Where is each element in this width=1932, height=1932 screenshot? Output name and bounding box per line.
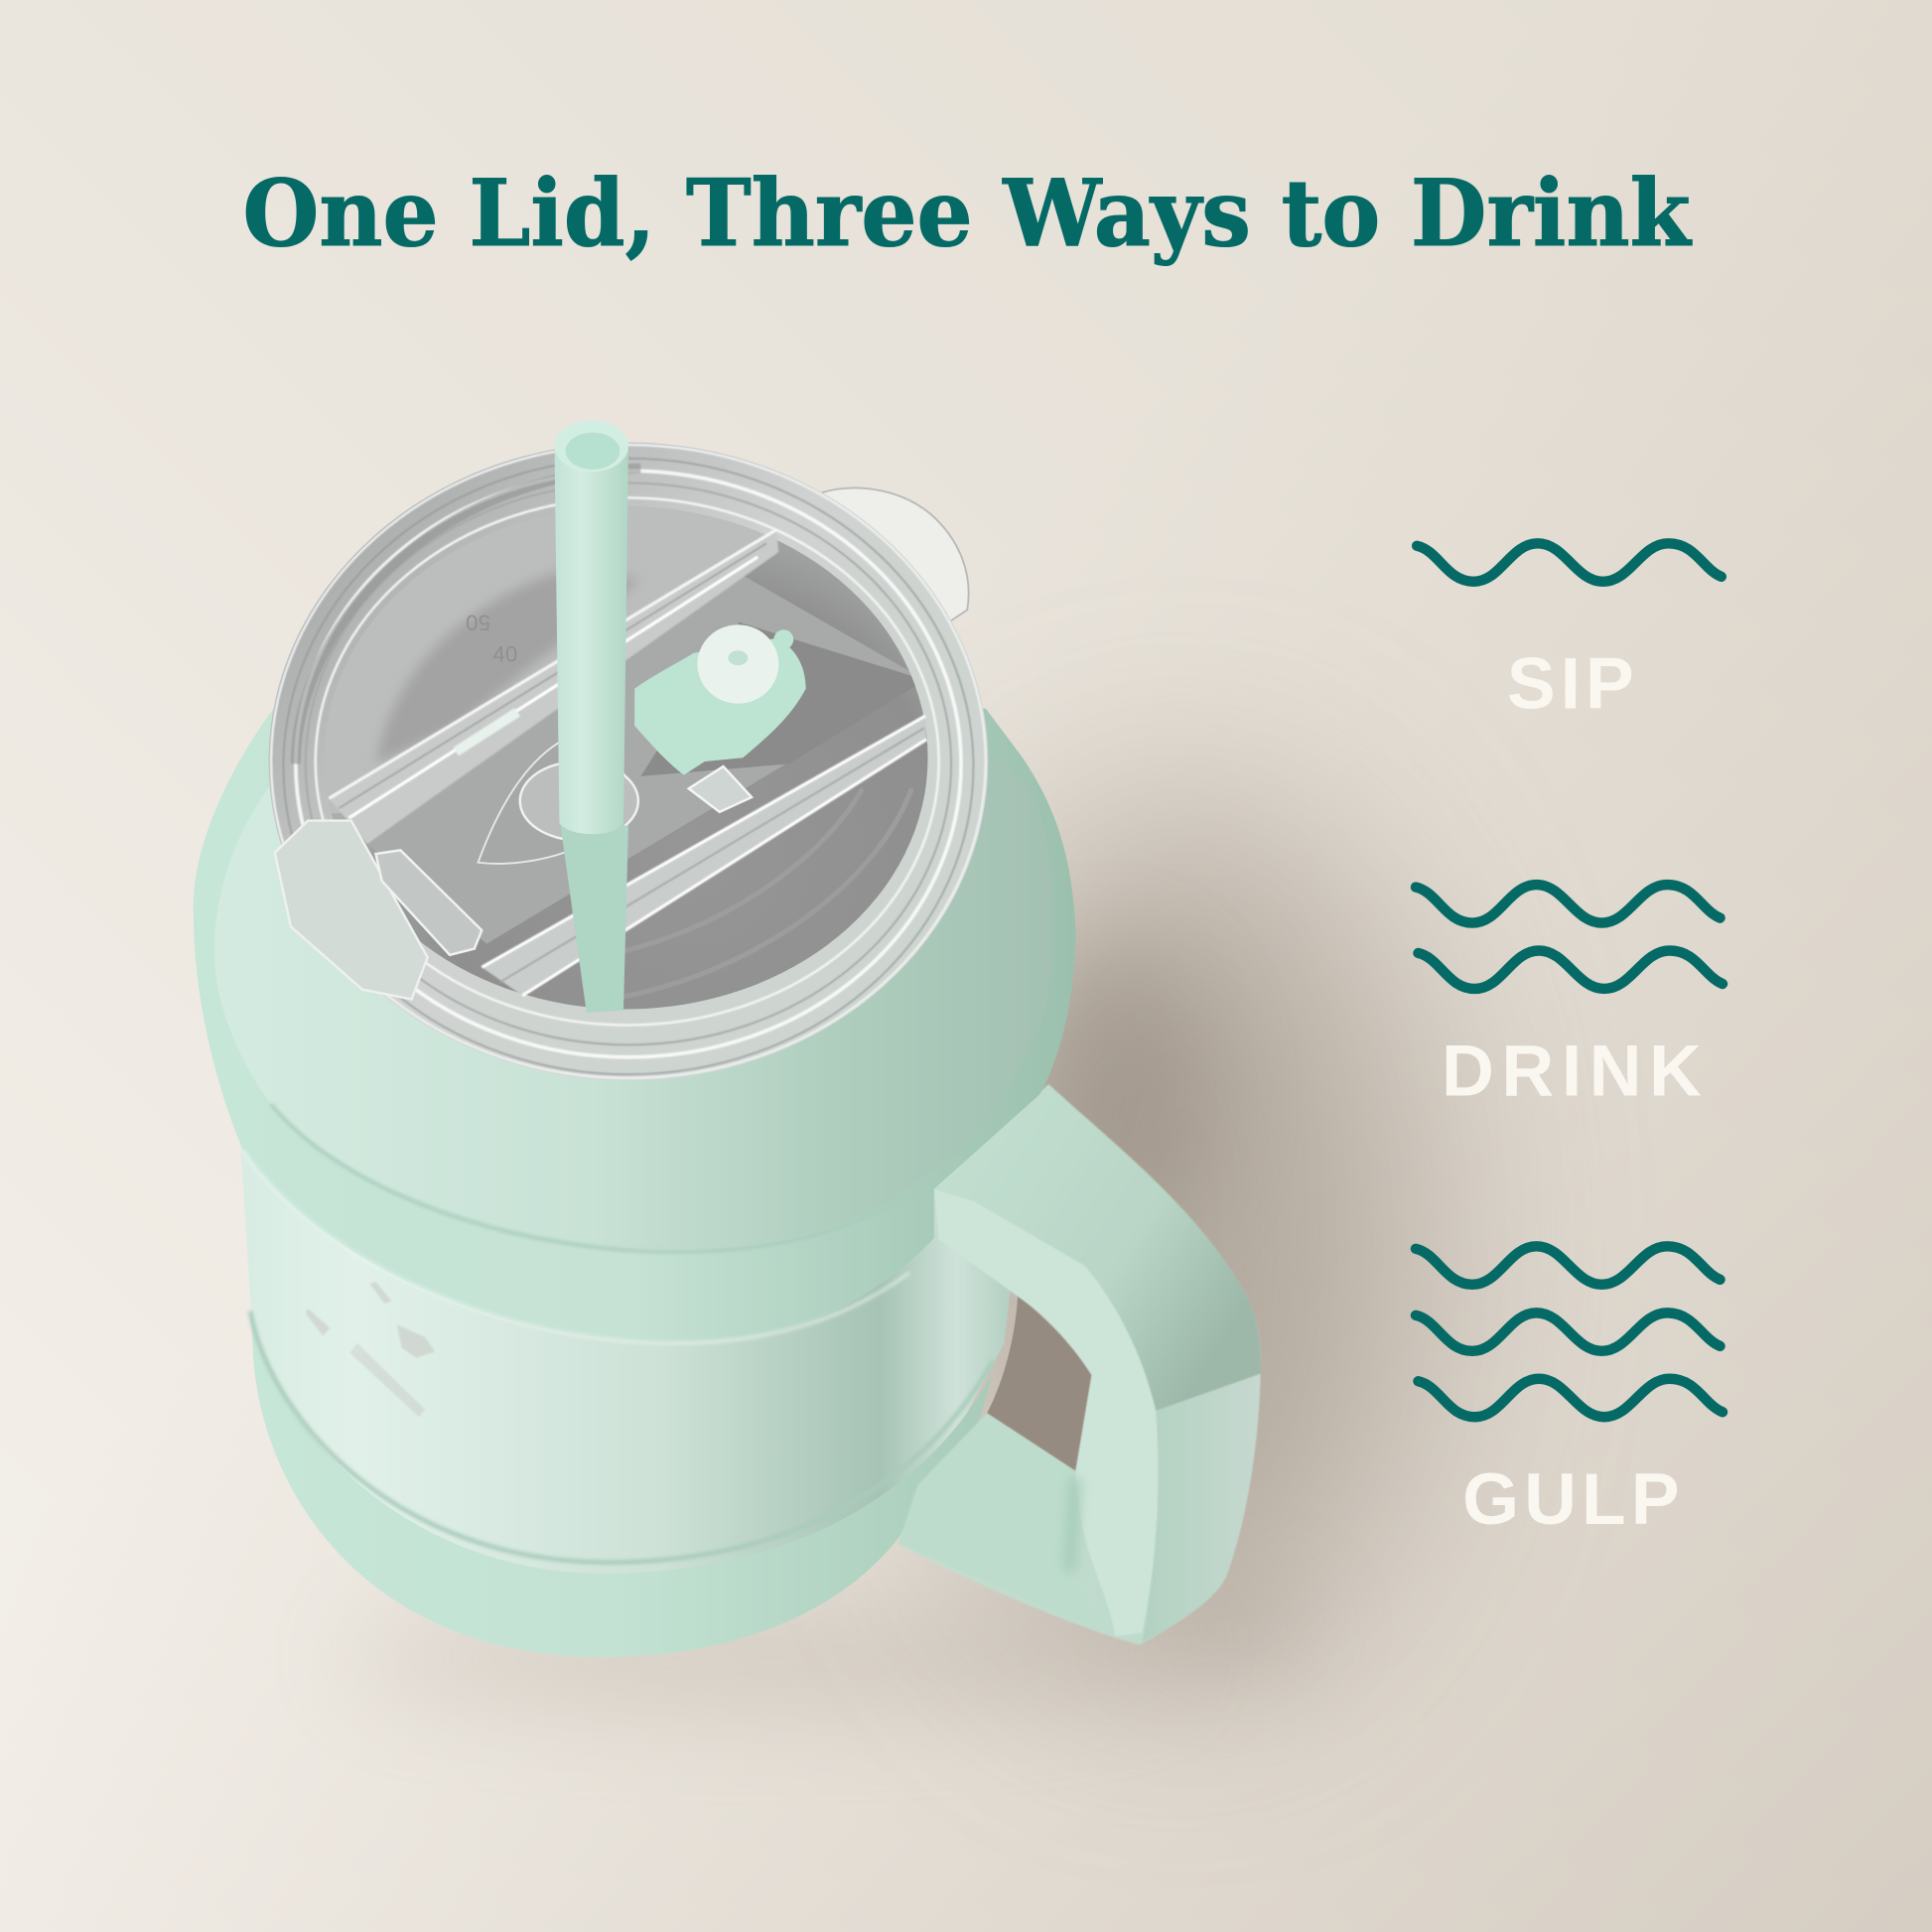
base band <box>250 1311 993 1657</box>
lower arm groove <box>1069 1478 1075 1571</box>
mint tab <box>634 638 806 775</box>
wave icon: gulp <box>1416 1246 1723 1417</box>
base band ridge <box>250 1311 993 1563</box>
slider bar lower <box>482 716 926 996</box>
handle top face <box>934 1084 1261 1411</box>
rim rings <box>271 445 986 1078</box>
slot panel <box>367 576 925 944</box>
collar band <box>194 709 1075 1343</box>
lid floor <box>324 506 928 1009</box>
lid <box>269 420 988 1080</box>
handle inner highlight <box>934 1189 1158 1636</box>
dome <box>214 740 1054 1248</box>
capacity marks <box>466 610 517 666</box>
label: drink: DRINK <box>1442 1030 1702 1111</box>
clear hinge <box>689 766 752 812</box>
straw opening <box>479 730 638 864</box>
collar lower ridge <box>242 1150 909 1343</box>
wave icon: drink <box>1416 885 1723 989</box>
dome ridge <box>271 1104 923 1252</box>
slot panel dark zone <box>640 622 925 776</box>
title: One Lid, Three Ways to Drink <box>242 159 1693 267</box>
lid outer rim <box>269 443 988 1080</box>
floor arcs <box>623 787 913 999</box>
upper segment <box>324 506 764 813</box>
capacity marks: 50 <box>466 610 490 634</box>
straw below lid <box>561 826 628 1013</box>
straw <box>554 420 628 834</box>
label: gulp: GULP <box>1462 1458 1680 1540</box>
left lug <box>275 821 428 1000</box>
label: sip: SIP <box>1507 643 1634 725</box>
handle side face <box>1142 1374 1261 1642</box>
lower arm <box>898 1414 1115 1636</box>
mug <box>194 420 1261 1657</box>
logo <box>306 1282 435 1417</box>
handle <box>898 1084 1261 1645</box>
capacity marks: 40 <box>492 641 517 666</box>
slider bar upper <box>329 530 778 844</box>
right lug <box>813 487 969 622</box>
handle opening <box>987 1297 1092 1471</box>
stopper <box>697 624 793 704</box>
mug lower body <box>240 1084 1023 1657</box>
lug window <box>376 850 482 955</box>
wave icon: sip <box>1417 543 1722 582</box>
floor details <box>308 492 925 998</box>
